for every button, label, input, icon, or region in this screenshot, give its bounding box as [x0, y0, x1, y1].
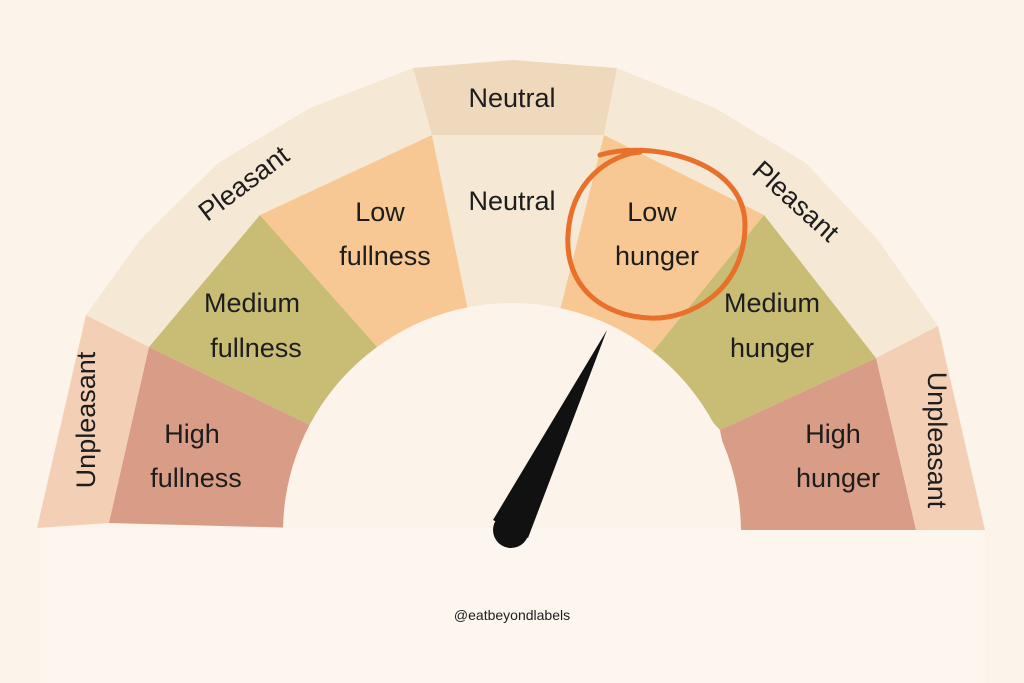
callout circle: [568, 150, 745, 318]
segment: high hunger: [720, 358, 916, 530]
labels: hunger: [796, 463, 880, 493]
label: pleasant left: Pleasant: [193, 140, 295, 227]
label: low hunger: Low: [627, 197, 677, 227]
segment: low hunger: [560, 135, 764, 355]
labels: fullness: [150, 463, 242, 493]
label: pleasant right: Pleasant: [747, 155, 845, 248]
footer handle: @eatbeyondlabels: [454, 607, 570, 623]
label: high hunger: High: [805, 419, 861, 449]
segment: low fullness: [260, 135, 468, 350]
label: low fullness: Low: [355, 197, 405, 227]
outer: unpleasant left: [37, 315, 149, 528]
label: neutral outer: Neutral: [468, 83, 556, 113]
segment: medium hunger: [650, 215, 876, 430]
label: medium hunger: Medium: [724, 288, 820, 318]
labels: fullness: [210, 333, 302, 363]
label: high fullness: High: [164, 419, 220, 449]
outer: pleasant right: [604, 68, 938, 358]
outer: pleasant left: [86, 68, 432, 347]
labels: hunger: [615, 241, 699, 271]
needle: [493, 330, 607, 548]
segment: high fullness: [109, 347, 310, 528]
hub: [283, 303, 741, 532]
segment: neutral: [432, 135, 604, 310]
label: unpleasant right: Unpleasant: [922, 372, 952, 509]
outer: neutral: [413, 60, 617, 135]
label: neutral inner: Neutral: [468, 186, 556, 216]
labels: [71, 83, 952, 509]
outer ring: [37, 60, 985, 530]
label: medium fullness: Medium: [204, 288, 300, 318]
label: unpleasant left: Unpleasant: [71, 351, 101, 488]
segment: medium fullness: [149, 215, 380, 425]
inner ring segments: [109, 135, 916, 530]
labels: hunger: [730, 333, 814, 363]
labels: fullness: [339, 241, 431, 271]
outer: unpleasant right: [876, 326, 985, 530]
